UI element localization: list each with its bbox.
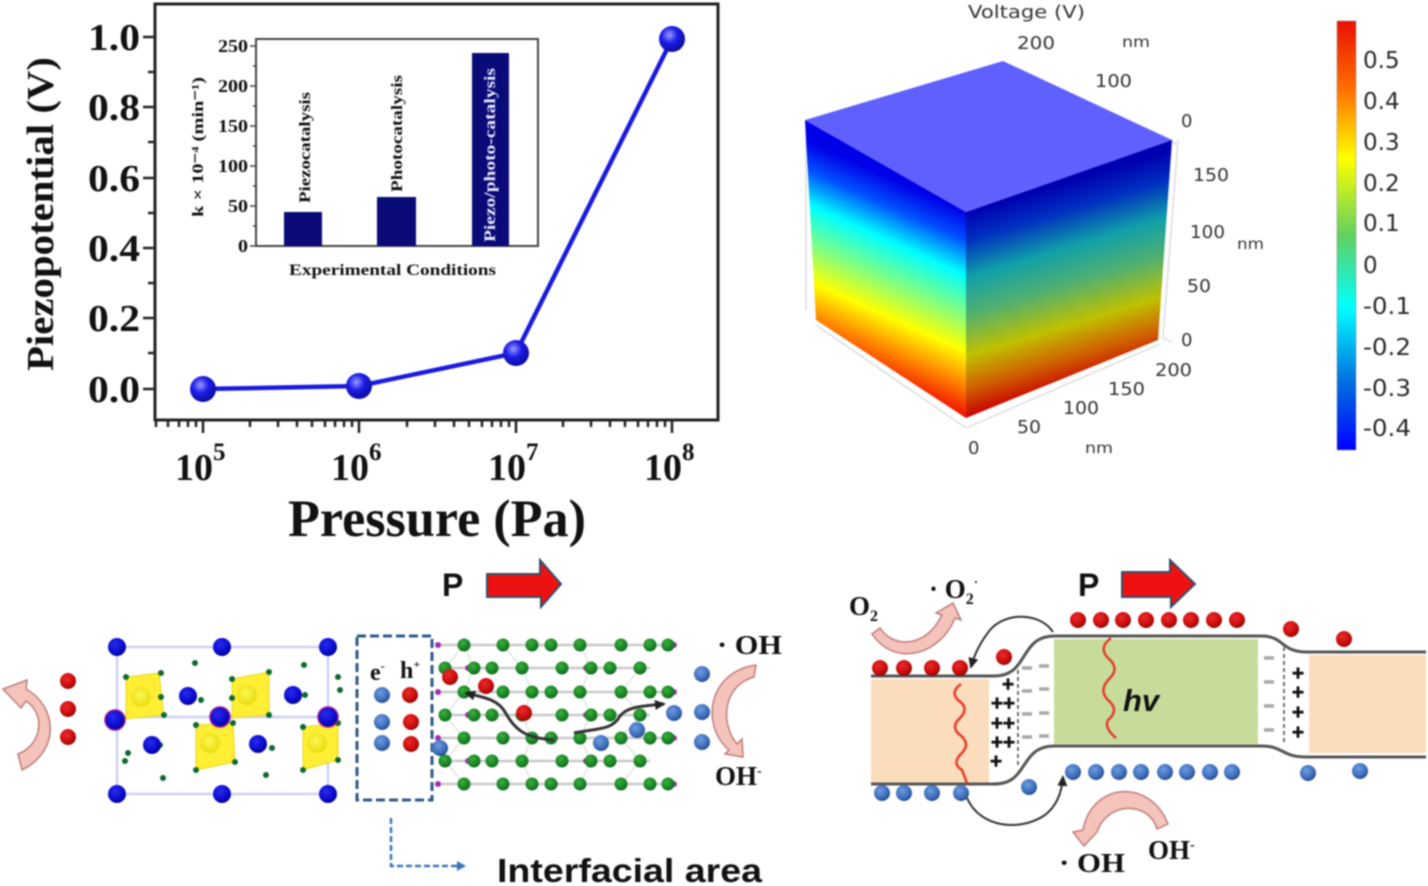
hydroxyl radical label: · OH [717, 630, 782, 660]
inset y labels: 0 [238, 236, 248, 256]
cube axis labels: 200 [1155, 360, 1192, 381]
cube axis labels: 0 [968, 438, 979, 459]
left semiconductor [871, 679, 989, 783]
cube axis labels: 100 [1190, 222, 1225, 243]
hydroxide label: - [757, 764, 762, 779]
x axis labels: 10 [331, 447, 369, 489]
inset y labels: 150 [218, 116, 248, 136]
hydroxide label: - [1190, 838, 1195, 853]
colour bar labels: 0.1 [1363, 211, 1400, 237]
right semiconductor [1309, 655, 1426, 753]
colour bar labels: -0.4 [1363, 416, 1411, 442]
positive charges: + [1292, 681, 1304, 704]
inset: bar chart of rate constants [190, 36, 538, 279]
pink arrow oxygen [872, 603, 961, 654]
x axis title: Pressure (Pa) [288, 490, 586, 548]
interface holes [402, 687, 419, 752]
electron hole labels: - [381, 659, 385, 673]
x axis labels: 8 [682, 439, 694, 466]
panel: voltage cube [805, 2, 1264, 459]
cube axis labels: 50 [1017, 417, 1041, 438]
positive charges: + [991, 712, 1003, 735]
positive charges: + [1292, 662, 1304, 685]
colour bar labels: -0.1 [1363, 294, 1411, 320]
polarization arrow [1122, 560, 1195, 607]
chart frame [155, 4, 718, 420]
lattice electrons [432, 666, 710, 756]
superoxide label: · O [929, 574, 966, 604]
cube axis labels: 0 [1181, 111, 1192, 132]
cube axis labels: 50 [1187, 276, 1211, 297]
cube axis labels: 150 [1108, 379, 1145, 400]
y axis labels: 0.2 [88, 298, 140, 340]
cube axis labels: 200 [1017, 33, 1055, 54]
electron hole labels: + [413, 657, 420, 671]
positive charges: + [991, 692, 1003, 715]
lattice [435, 638, 677, 790]
positive charges: + [1292, 701, 1304, 724]
positive charges: + [991, 731, 1003, 754]
x axis labels: 7 [526, 439, 538, 466]
lattice holes [442, 669, 532, 721]
inset: bar chart of rate constants: Photocatalysis [389, 75, 406, 192]
colour bar labels: -0.3 [1363, 376, 1411, 402]
cube right face [966, 140, 1172, 418]
superoxide label: 2 [966, 591, 974, 608]
colour bar labels: 0.3 [1363, 130, 1400, 156]
inset x title: Experimental Conditions [289, 262, 496, 279]
charge transport arrows [466, 693, 664, 740]
electrons bottom row [874, 763, 1368, 801]
cube axis labels: nm [1085, 439, 1113, 457]
cube axis labels [968, 33, 1264, 459]
positive charges [990, 662, 1304, 773]
colour bar labels [1363, 48, 1411, 442]
positive charges: + [1003, 712, 1015, 735]
y axis title: Piezopotential (V) [20, 57, 62, 371]
hydroxide label: OH [715, 761, 757, 791]
colour bar labels: 0.4 [1363, 89, 1400, 115]
inset y labels [218, 36, 248, 256]
O2 label: O [849, 591, 870, 621]
cube title: Voltage (V) [968, 2, 1085, 23]
y axis labels: 0.8 [88, 87, 140, 129]
conduction band edge [871, 636, 1426, 676]
colour bar legend [1337, 21, 1411, 450]
superoxide label: · [974, 574, 978, 589]
inset y title: k × 10⁻⁴ (min⁻¹) [190, 77, 207, 217]
photon label: hv [1123, 683, 1161, 718]
inset y labels: 200 [218, 76, 248, 96]
inset y labels: 250 [218, 36, 248, 56]
cube axis labels: 0 [1181, 330, 1192, 351]
x axis labels: 6 [369, 439, 382, 466]
y axis labels: 1.0 [88, 17, 140, 59]
x axis labels: 10 [175, 447, 213, 489]
holes top row [872, 612, 1352, 676]
hole transfer arrow [971, 617, 1053, 667]
left charges [60, 673, 76, 745]
x axis labels [175, 439, 694, 489]
electron hole labels [370, 657, 420, 686]
colour bar labels: -0.2 [1363, 335, 1411, 361]
positive charges: + [1003, 692, 1015, 715]
y axis labels [88, 17, 140, 411]
negative charges [1022, 658, 1274, 737]
positive charges: + [1292, 721, 1304, 744]
cube axis labels: nm [1122, 33, 1150, 51]
y axis labels: 0.6 [88, 158, 140, 200]
colour bar [1337, 21, 1356, 450]
hydroxyl radical label: · OH [1059, 848, 1125, 878]
electron hole labels: h [400, 658, 413, 684]
P label: P [442, 567, 463, 603]
cube axis lines [806, 125, 1178, 428]
crystal unit cell [105, 638, 343, 803]
inset ticks [250, 46, 256, 246]
panel: crystal heterojunction schematic [3, 560, 782, 886]
hydroxide label: OH [1148, 835, 1190, 865]
colour bar labels: 0.5 [1363, 48, 1400, 74]
curved arrow right [712, 665, 756, 757]
cube axis labels: 150 [1193, 165, 1229, 186]
y axis labels: 0.0 [88, 369, 140, 411]
centre semiconductor [1054, 639, 1258, 744]
bar labels: Piezocatalysis [297, 92, 314, 203]
interfacial dashed box [357, 636, 432, 800]
x axis labels: 10 [644, 447, 682, 489]
valence band edge [871, 746, 1426, 784]
panel: piezopotential line chart [20, 4, 718, 548]
inset y labels: 100 [218, 156, 248, 176]
y axis labels: 0.4 [88, 228, 140, 270]
colour bar labels: 0 [1363, 253, 1378, 279]
positive charges: + [1002, 673, 1014, 696]
inset frame [256, 39, 538, 246]
curved arrow left [3, 680, 50, 770]
electron transfer arrow [967, 777, 1063, 825]
cube axis labels: 100 [1095, 71, 1132, 92]
cube axis labels: 100 [1063, 398, 1099, 419]
data line [203, 39, 672, 389]
axis ticks [143, 37, 672, 433]
inset y labels: 50 [228, 196, 248, 216]
electron hole labels: e [370, 660, 381, 686]
depletion dashed lines [1018, 647, 1284, 767]
cube left face [805, 120, 966, 418]
O2 label: 2 [870, 608, 878, 625]
cube axis labels: nm [1237, 235, 1264, 253]
x axis labels: 5 [213, 439, 226, 466]
interfacial leader arrow [391, 818, 464, 866]
interface electrons [374, 687, 390, 751]
inset: bar chart of rate constants: Piezo/photo-catalysis [482, 68, 499, 242]
P label: P [1078, 567, 1099, 603]
pink arrow hydroxyl [1073, 792, 1168, 846]
positive charges: + [990, 750, 1002, 773]
bars [284, 53, 509, 246]
photon waves [955, 638, 1116, 783]
x axis labels: 10 [488, 447, 526, 489]
panel: band diagram [849, 560, 1426, 878]
cube top face [805, 61, 1172, 212]
data markers [190, 26, 685, 402]
polarization arrow [487, 560, 561, 607]
positive charges: + [1003, 731, 1015, 754]
colour bar labels: 0.2 [1363, 171, 1400, 197]
